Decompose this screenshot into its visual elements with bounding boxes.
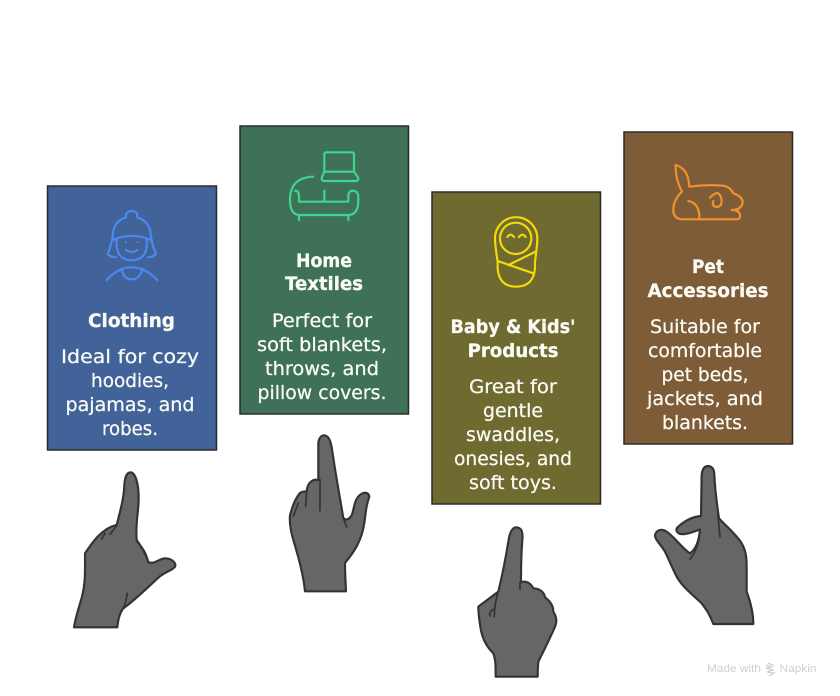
text: home textiles description: throws, and <box>265 358 379 380</box>
text: home textiles description: soft blankets, <box>257 334 387 356</box>
watermark: made with napkin <box>707 663 816 676</box>
icon: hand pointing at baby products <box>478 527 556 677</box>
text: baby and kids description: swaddles, <box>466 424 560 446</box>
text: baby and kids description: soft toys. <box>469 472 557 494</box>
heading: baby and kids products: Baby & Kids' <box>450 316 576 338</box>
icon: child in hat <box>107 211 157 280</box>
icon: hand pointing at pet accessories <box>655 466 753 624</box>
heading: home textiles: Textiles <box>285 273 363 295</box>
text: baby and kids description: onesies, and <box>454 448 572 470</box>
text: pet accessories description: Suitable for <box>650 316 760 338</box>
text: pet accessories description <box>646 316 763 434</box>
heading: pet accessories: Pet <box>692 256 724 278</box>
watermark: made with napkin: Made with <box>707 663 761 675</box>
panel: clothing <box>48 186 216 450</box>
heading: home textiles <box>285 250 363 295</box>
text: pet accessories description: pet beds, <box>662 364 748 386</box>
watermark: made with napkin: Napkin <box>780 663 816 675</box>
text: baby and kids description: gentle <box>483 400 543 422</box>
panel: pet accessories <box>624 132 792 444</box>
text: pet accessories description: blankets. <box>662 412 748 434</box>
heading: baby and kids products <box>450 316 576 362</box>
text: clothing description: robes. <box>102 418 158 440</box>
icon: resting dog <box>673 165 743 219</box>
text: clothing description: hoodies, <box>91 370 169 392</box>
heading: pet accessories <box>648 256 768 302</box>
text: clothing description <box>61 346 199 440</box>
icon: sofa with cushion <box>290 152 358 220</box>
heading: home textiles: Home <box>296 250 352 272</box>
panel: home textiles <box>240 126 408 414</box>
text: pet accessories description: comfortable <box>648 340 762 362</box>
icon: hand pointing at clothing <box>74 472 175 627</box>
text: home textiles description: Perfect for <box>272 310 372 332</box>
icon: hand pointing at home textiles <box>290 435 369 591</box>
text: clothing description: pajamas, and <box>66 394 194 416</box>
icon: swaddled baby <box>495 217 537 287</box>
text: baby and kids description: Great for <box>469 376 557 398</box>
text: baby and kids description <box>454 376 572 494</box>
panel: baby and kids products <box>432 192 600 504</box>
heading: pet accessories: Accessories <box>648 280 768 302</box>
text: home textiles description <box>257 310 387 404</box>
text: home textiles description: pillow covers. <box>258 382 386 404</box>
heading: baby and kids products: Products <box>468 340 558 362</box>
heading: clothing: Clothing <box>88 310 175 332</box>
text: clothing description: Ideal for cozy <box>61 346 199 368</box>
text: pet accessories description: jackets, and <box>646 388 763 410</box>
